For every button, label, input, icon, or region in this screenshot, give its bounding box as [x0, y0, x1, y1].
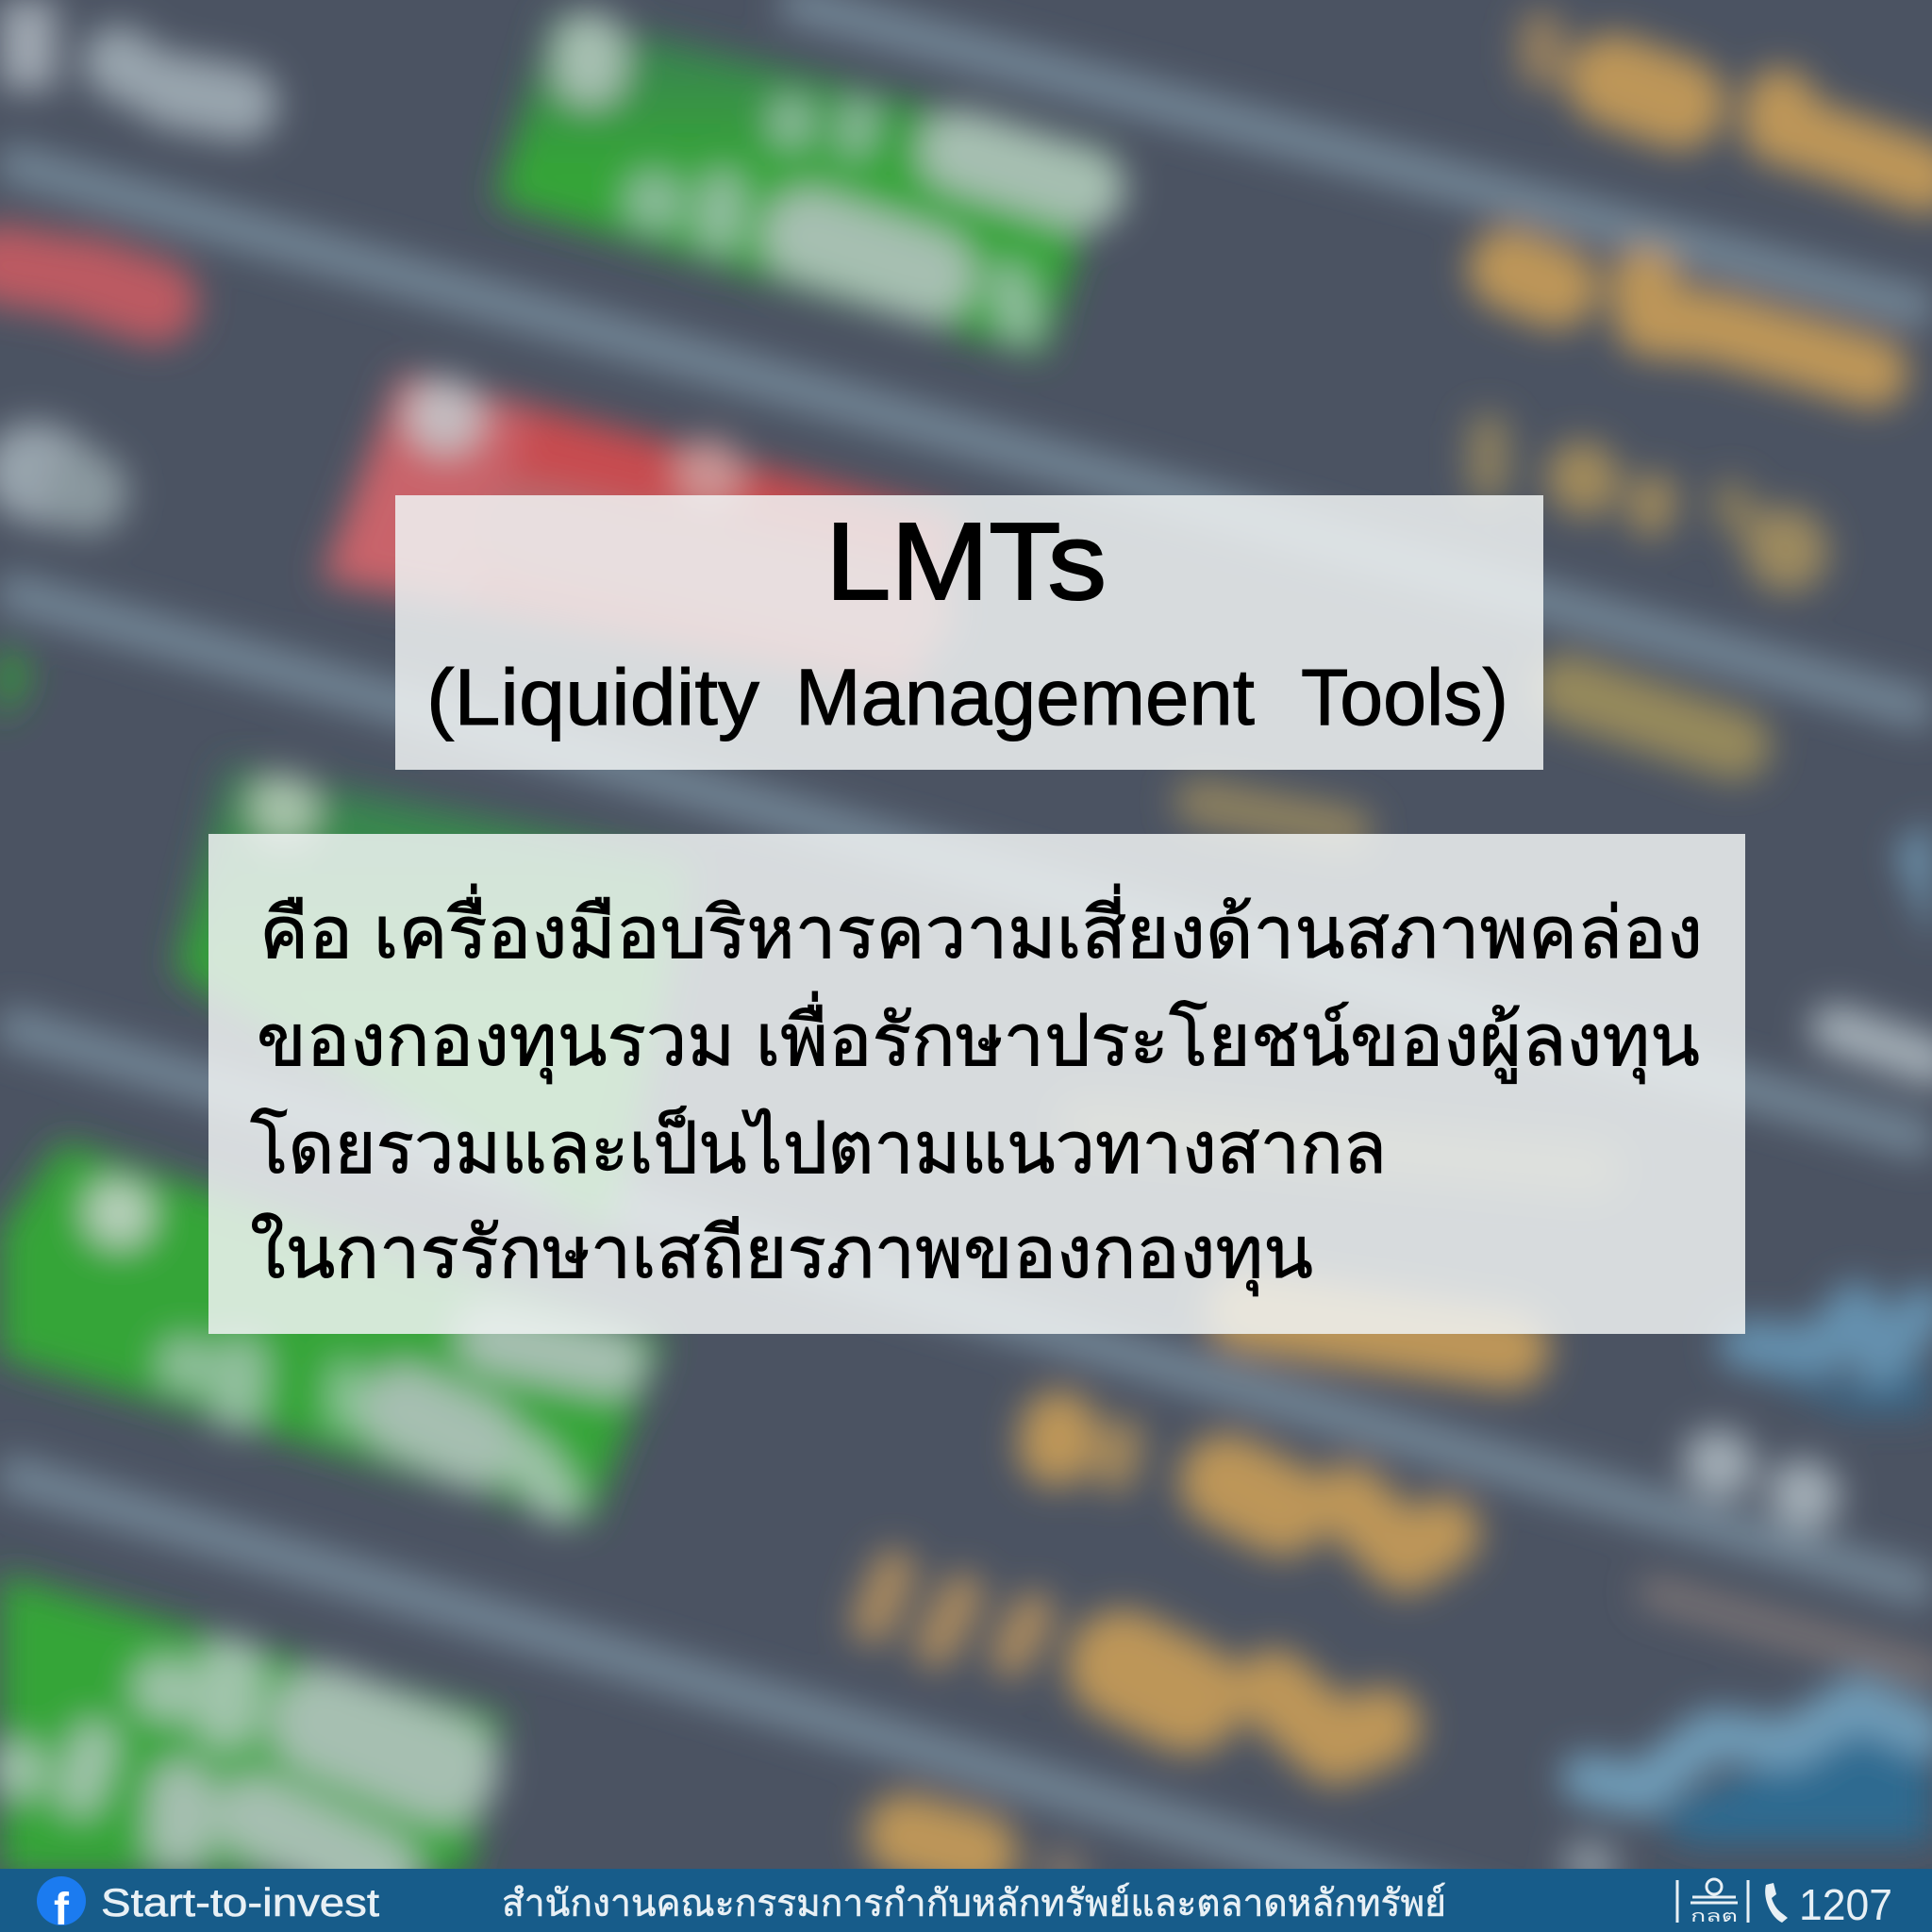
- icon: phone: [1765, 1883, 1788, 1923]
- panel: title: [395, 495, 1543, 770]
- heading: LMTs: LMTs: [825, 500, 1107, 623]
- blurred green box text: [17, 47, 1084, 1873]
- icon: SEC emblem: [1677, 1879, 1748, 1925]
- blurred sparkline areas: [1755, 1358, 1932, 1415]
- definition text block: ของกองทุนรวม เพื่อรักษาประโยชน์ของผู้ลงทุน: [257, 991, 1700, 1084]
- panel: definition: [208, 834, 1745, 1334]
- icon: SEC emblem: กลต: [1690, 1907, 1738, 1925]
- icon: facebook: [37, 1876, 86, 1932]
- subheading: Liquidity Management Tools: (Liquidity: [426, 653, 759, 741]
- definition text block: โดยรวมและเป็นไปตามแนวทางสากล: [250, 1106, 1387, 1189]
- definition text block: [250, 884, 1703, 1296]
- facebook page name: Start-to-invest: [101, 1880, 379, 1924]
- hotline number: 1207: [1799, 1880, 1892, 1929]
- subheading: Liquidity Management Tools: Tools): [1301, 653, 1508, 741]
- subheading: Liquidity Management Tools: Management: [795, 653, 1255, 741]
- footer bar: [0, 1869, 1932, 1932]
- blurred orange figures: [873, 33, 1932, 1873]
- definition text block: ในการรักษาเสถียรภาพของกองทุน: [250, 1212, 1313, 1296]
- blurred grey labels: [33, 61, 1932, 1496]
- subheading: Liquidity Management Tools: [426, 653, 1508, 741]
- definition text block: คือ เครื่องมือบริหารความเสี่ยงด้านสภาพคล่อง: [259, 884, 1703, 974]
- organisation name: สำนักงานคณะกรรมการกำกับหลักทรัพย์และตลาดหลักทรัพย์: [502, 1882, 1446, 1924]
